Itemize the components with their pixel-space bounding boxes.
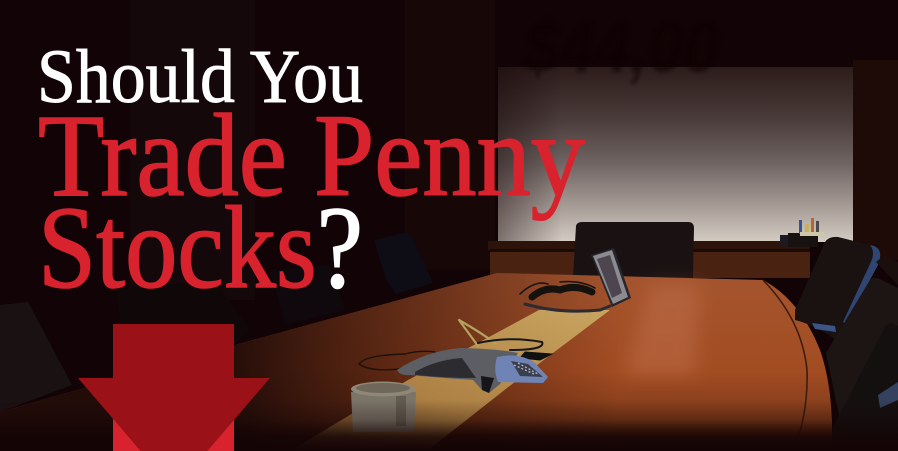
bottom shadow fade — [0, 400, 898, 451]
whiteboard on the wall — [498, 67, 853, 242]
right side chairs — [795, 237, 898, 451]
far chair at table head — [573, 222, 694, 278]
conference table — [0, 273, 832, 451]
title — [37, 35, 585, 313]
title line: Should You: Should You — [37, 35, 363, 119]
icon: conference phone — [397, 348, 548, 393]
title line: Stocks?: Stocks? — [38, 182, 363, 313]
left dark chairs in shadow — [0, 265, 345, 412]
arrow lower light panel — [113, 415, 234, 451]
arrow dark head and stem — [78, 324, 270, 451]
down arrow — [78, 324, 270, 451]
desk items: pens and holder — [780, 218, 824, 247]
paper table runner — [290, 310, 610, 451]
title line: Trade Penny: Trade Penny — [38, 90, 585, 221]
icon: ceramic cup — [351, 382, 416, 432]
faded price figure: $44,00 — [523, 8, 719, 88]
table cables — [359, 282, 610, 370]
icon: tablet display — [591, 248, 631, 307]
sideboard cabinet — [488, 241, 810, 278]
left side chair — [374, 233, 433, 294]
